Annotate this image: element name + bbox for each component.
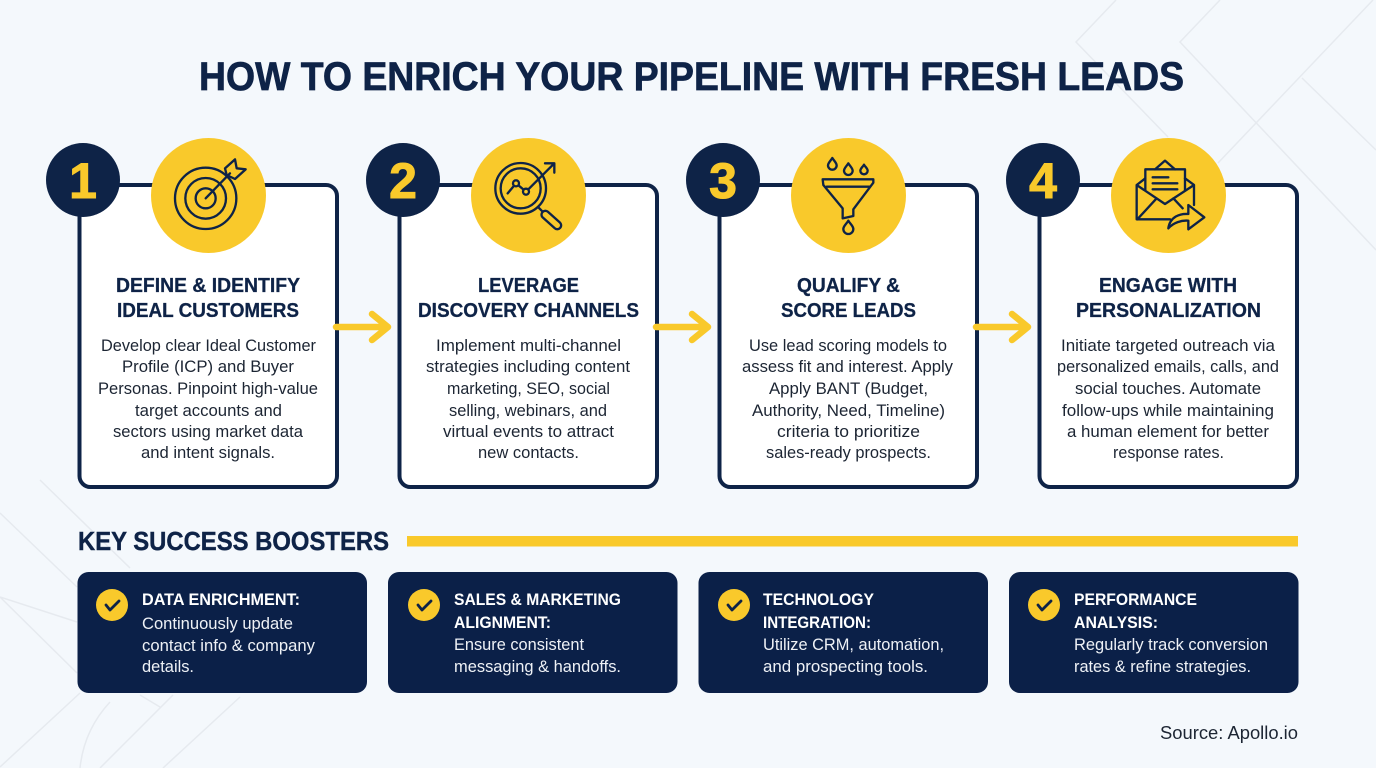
- icon: target with arrow: [151, 138, 266, 253]
- panel: step 3: [686, 138, 977, 487]
- booster text: Utilize CRM, automation,: [763, 636, 944, 654]
- body text: Implement multi-channel: [436, 337, 621, 355]
- body text: [1057, 337, 1279, 462]
- section heading rule: [407, 536, 1298, 546]
- icon: check badge: [718, 589, 750, 621]
- booster text: ALIGNMENT:: [454, 614, 551, 632]
- body text: target accounts and: [135, 402, 282, 420]
- icon: magnifier with chart: [471, 138, 586, 253]
- body text: sectors using market data: [113, 423, 304, 441]
- body text: new contacts.: [478, 444, 579, 462]
- booster text: DATA ENRICHMENT:: [142, 591, 300, 609]
- card frame: [720, 185, 977, 487]
- booster text: INTEGRATION:: [763, 614, 871, 632]
- panel: step 2: [366, 138, 657, 487]
- booster text: [142, 591, 316, 676]
- body text: [742, 337, 954, 462]
- number badge 1: 1: [69, 153, 97, 209]
- booster text: Ensure consistent: [454, 636, 584, 654]
- body text: a human element for better: [1067, 423, 1270, 441]
- body text: [426, 337, 630, 462]
- booster text: and prospecting tools.: [763, 658, 928, 676]
- arrow: step 1 to step 2: [336, 314, 388, 340]
- heading: [781, 274, 916, 322]
- body text: Use lead scoring models to: [749, 337, 947, 355]
- body text: selling, webinars, and: [449, 402, 607, 420]
- heading: DISCOVERY CHANNELS: [418, 299, 639, 322]
- arrow: step 2 to step 3: [656, 314, 708, 340]
- booster text: details.: [142, 658, 194, 676]
- body text: [98, 337, 318, 462]
- body text: criteria to prioritize: [777, 423, 920, 441]
- source note: Source: Apollo.io: [1160, 723, 1298, 743]
- icon: funnel with drops: [791, 138, 906, 253]
- panel: technology integration: [698, 572, 988, 693]
- body text: personalized emails, calls, and: [1057, 358, 1279, 376]
- number badge 4: [1006, 143, 1080, 217]
- booster text: [1074, 591, 1268, 676]
- card frame: [1040, 185, 1297, 487]
- body text: Profile (ICP) and Buyer: [122, 358, 295, 376]
- number badge 3: 3: [709, 153, 737, 209]
- icon: check badge: [1028, 589, 1060, 621]
- heading: ENGAGE WITH: [1099, 274, 1237, 297]
- panel: performance analysis: [1009, 572, 1298, 693]
- booster text: TECHNOLOGY: [763, 591, 874, 609]
- body text: follow-ups while maintaining: [1062, 402, 1274, 420]
- body text: response rates.: [1113, 444, 1224, 462]
- body text: virtual events to attract: [443, 423, 614, 441]
- card frame: [400, 185, 657, 487]
- body text: strategies including content: [426, 358, 630, 376]
- booster text: [763, 591, 944, 676]
- body text: marketing, SEO, social: [447, 380, 610, 398]
- heading: [116, 274, 300, 322]
- body text: Apply BANT (Budget,: [769, 380, 928, 398]
- number badge 3: [686, 143, 760, 217]
- heading: LEVERAGE: [478, 274, 579, 297]
- body text: Authority, Need, Timeline): [752, 402, 945, 420]
- panel: sales and marketing alignment: [388, 572, 678, 693]
- panel: data enrichment: [78, 572, 367, 693]
- booster text: Continuously update: [142, 615, 293, 633]
- booster text: [454, 591, 621, 676]
- arrow: step 3 to step 4: [976, 314, 1028, 340]
- number badge 2: 2: [389, 153, 417, 209]
- body text: social touches. Automate: [1075, 380, 1261, 398]
- booster text: Regularly track conversion: [1074, 636, 1268, 654]
- icon: check badge: [96, 589, 128, 621]
- booster text: contact info & company: [142, 637, 316, 655]
- heading: [418, 274, 639, 322]
- body text: sales-ready prospects.: [766, 444, 931, 462]
- icon: check badge: [408, 589, 440, 621]
- body text: and intent signals.: [141, 444, 275, 462]
- body text: Develop clear Ideal Customer: [101, 337, 317, 355]
- body text: assess fit and interest. Apply: [742, 358, 954, 376]
- panel: step 1: [46, 138, 337, 487]
- section heading: key success boosters: KEY SUCCESS BOOSTERS: [78, 528, 389, 556]
- booster text: PERFORMANCE: [1074, 591, 1197, 609]
- heading: IDEAL CUSTOMERS: [117, 299, 299, 322]
- icon: envelope with send arrow: [1111, 138, 1226, 253]
- heading: [1076, 274, 1261, 322]
- heading: PERSONALIZATION: [1076, 299, 1261, 322]
- panel: step 4: [1006, 138, 1297, 487]
- heading: SCORE LEADS: [781, 299, 916, 322]
- title: HOW TO ENRICH YOUR PIPELINE WITH FRESH LEADS: [199, 55, 1184, 99]
- heading: QUALIFY &: [797, 274, 900, 297]
- number badge 2: [366, 143, 440, 217]
- body text: Personas. Pinpoint high-value: [98, 380, 318, 398]
- card frame: [80, 185, 337, 487]
- booster text: ANALYSIS:: [1074, 614, 1158, 632]
- heading: DEFINE & IDENTIFY: [116, 274, 300, 297]
- number badge 4: 4: [1029, 153, 1057, 209]
- booster text: SALES & MARKETING: [454, 591, 621, 609]
- booster text: rates & refine strategies.: [1074, 658, 1251, 676]
- body text: Initiate targeted outreach via: [1061, 337, 1276, 355]
- booster text: messaging & handoffs.: [454, 658, 621, 676]
- number badge 1: [46, 143, 120, 217]
